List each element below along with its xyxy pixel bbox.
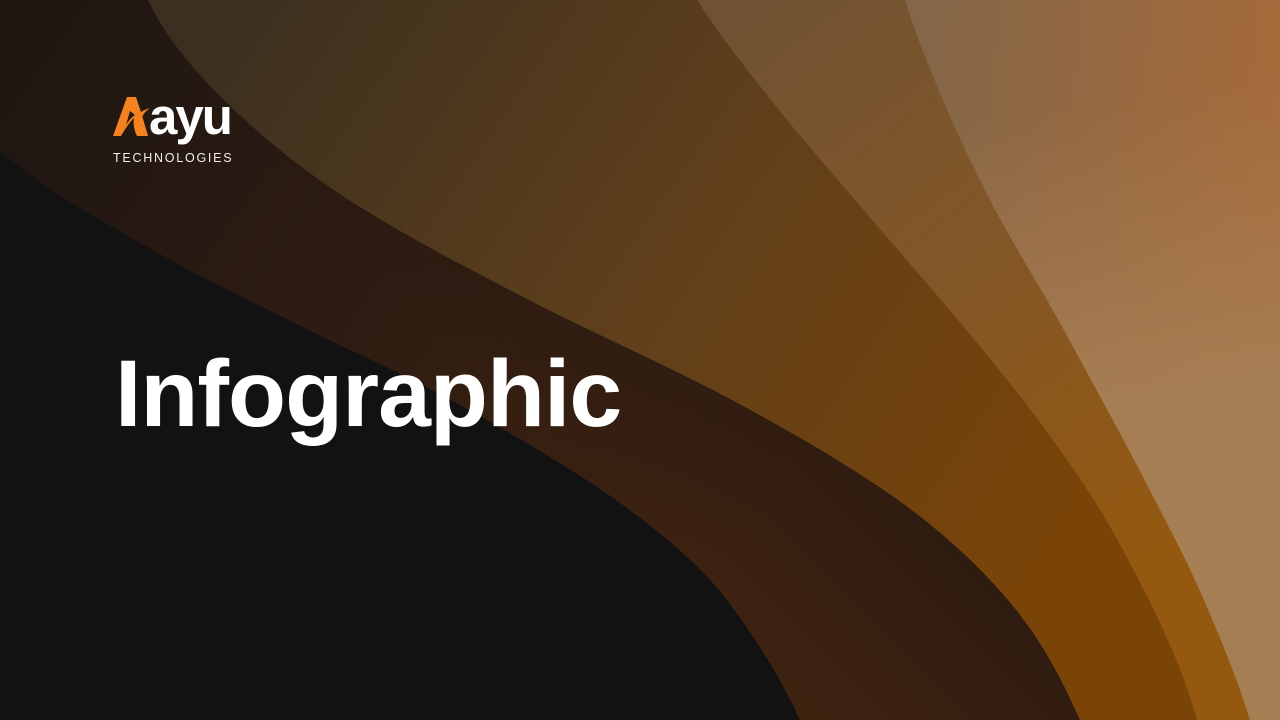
wave: amber (697, 0, 1280, 720)
title: Infographic (115, 341, 621, 447)
wave: light tan highlight (905, 0, 1280, 720)
icon: orange A logo mark (113, 97, 150, 136)
wave: light tan (905, 0, 1280, 720)
logo tagline: TECHNOLOGIES (113, 151, 233, 165)
logo wordmark: ayu (149, 88, 231, 145)
